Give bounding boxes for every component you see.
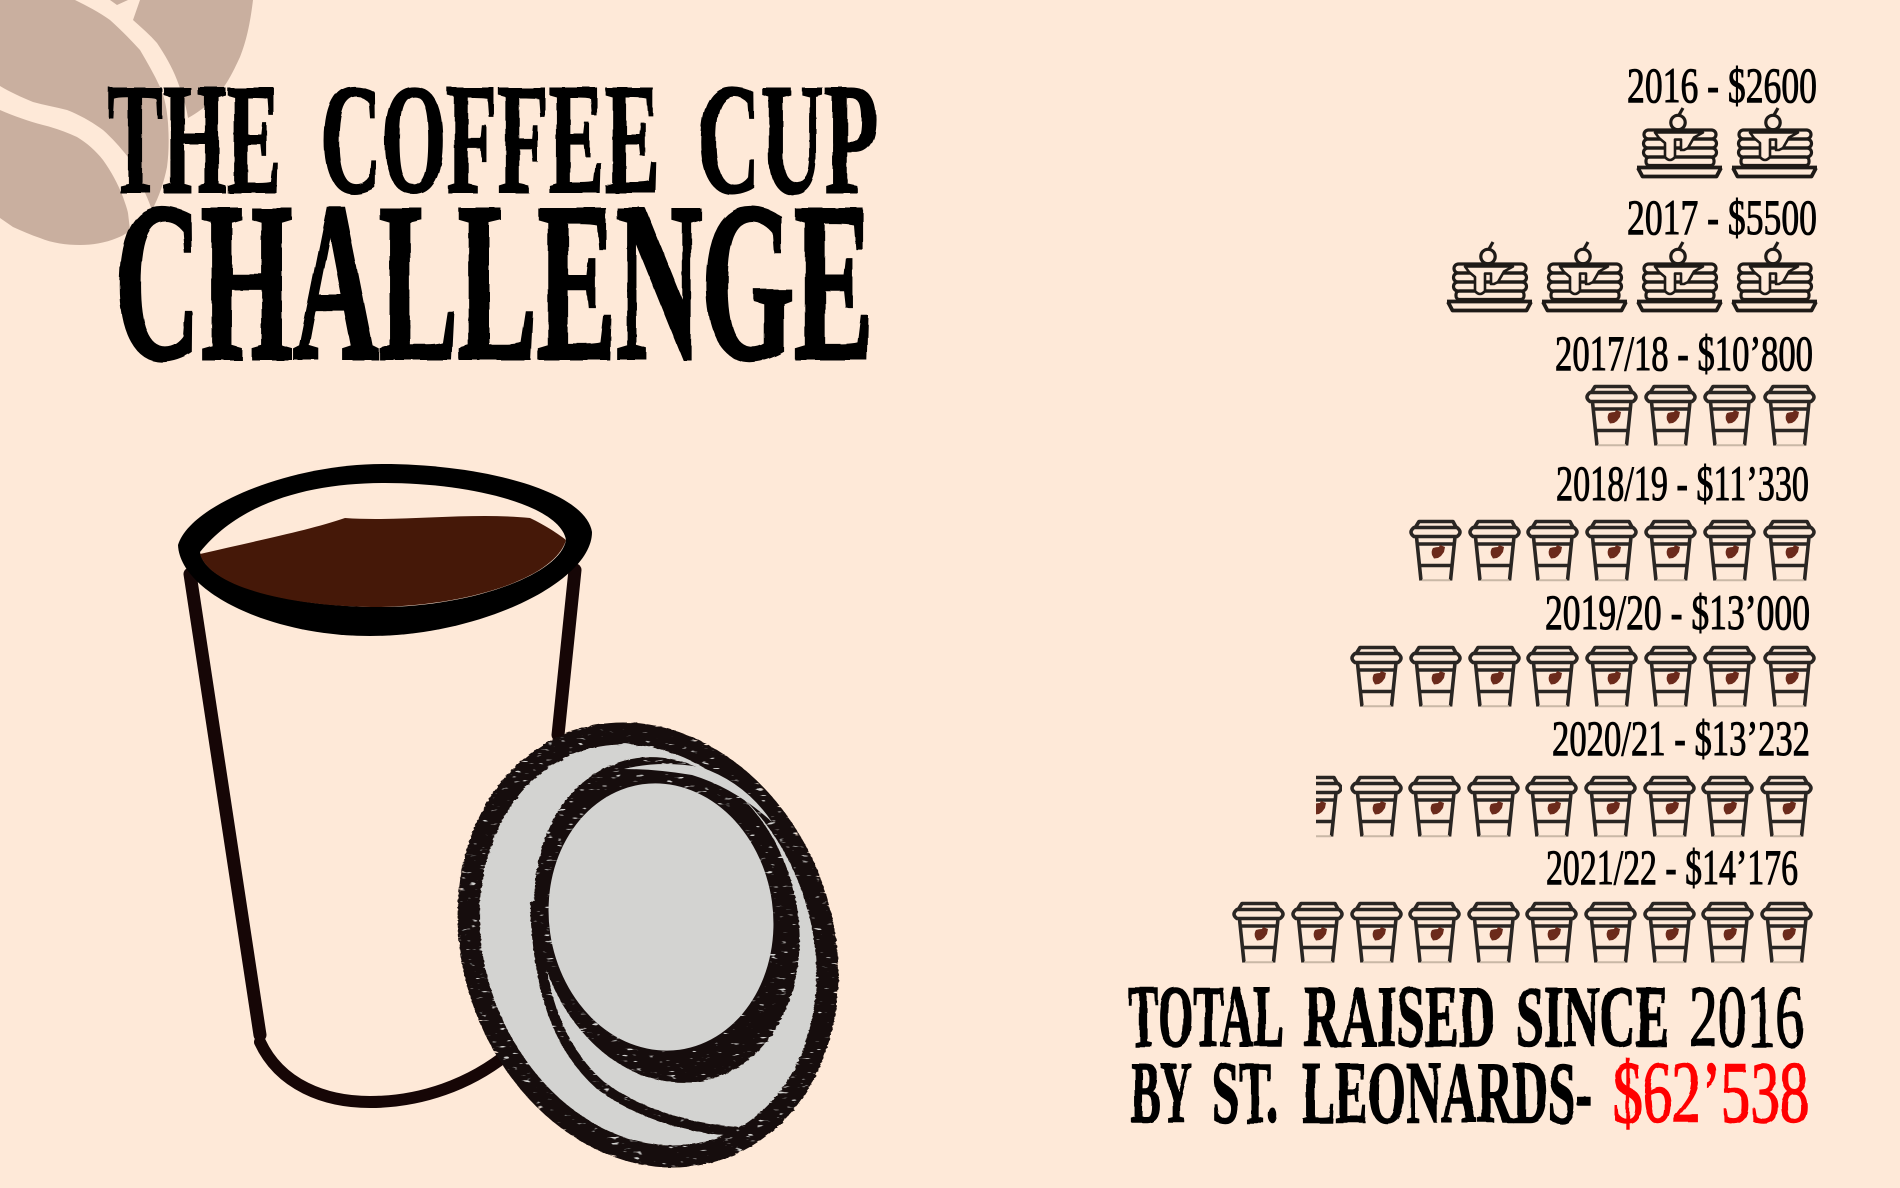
row: 2017 pancake icons xyxy=(1447,242,1817,310)
coffee surface xyxy=(200,516,566,607)
lid swirl highlight xyxy=(624,764,772,822)
total raised text: $62’538 xyxy=(1613,1045,1809,1142)
row: 2016 pancake icons xyxy=(1637,108,1817,176)
total raised text: ST. xyxy=(1212,1045,1279,1142)
icon: coffee bean xyxy=(0,0,253,245)
cup body xyxy=(190,570,575,1102)
total raised text: BY xyxy=(1131,1045,1192,1142)
total raised text: LEONARDS- xyxy=(1302,1045,1592,1142)
lid dark brush rings xyxy=(411,683,885,1188)
title xyxy=(108,52,878,407)
illustration: coffee cup with lid xyxy=(178,464,896,1188)
row: 2020/21 cup icons xyxy=(1292,778,1811,836)
total raised text: RAISED xyxy=(1304,969,1495,1066)
row: 2018/19 cup icons xyxy=(1411,522,1814,580)
title: COFFEE xyxy=(321,52,660,227)
lid xyxy=(400,670,896,1188)
row: 2021/22 cup icons xyxy=(1234,904,1811,962)
cup rim xyxy=(178,464,592,636)
title: CUP xyxy=(697,52,878,227)
total raised text: SINCE xyxy=(1516,969,1669,1066)
total raised text xyxy=(1128,969,1809,1142)
total raised text: 2016 xyxy=(1689,969,1804,1066)
row: 2017/18 cup icons xyxy=(1587,386,1814,446)
row: 2017 label: 2017 - $5500 xyxy=(1627,189,1817,245)
lid centre disc xyxy=(531,769,791,1065)
title: CHALLENGE xyxy=(115,157,873,407)
row: 2016 label: 2016 - $2600 xyxy=(1627,57,1817,113)
total raised text: TOTAL xyxy=(1128,969,1284,1066)
row: 2019/20 cup icons xyxy=(1352,648,1814,706)
lid plate xyxy=(400,670,896,1188)
title: THE xyxy=(108,52,281,227)
